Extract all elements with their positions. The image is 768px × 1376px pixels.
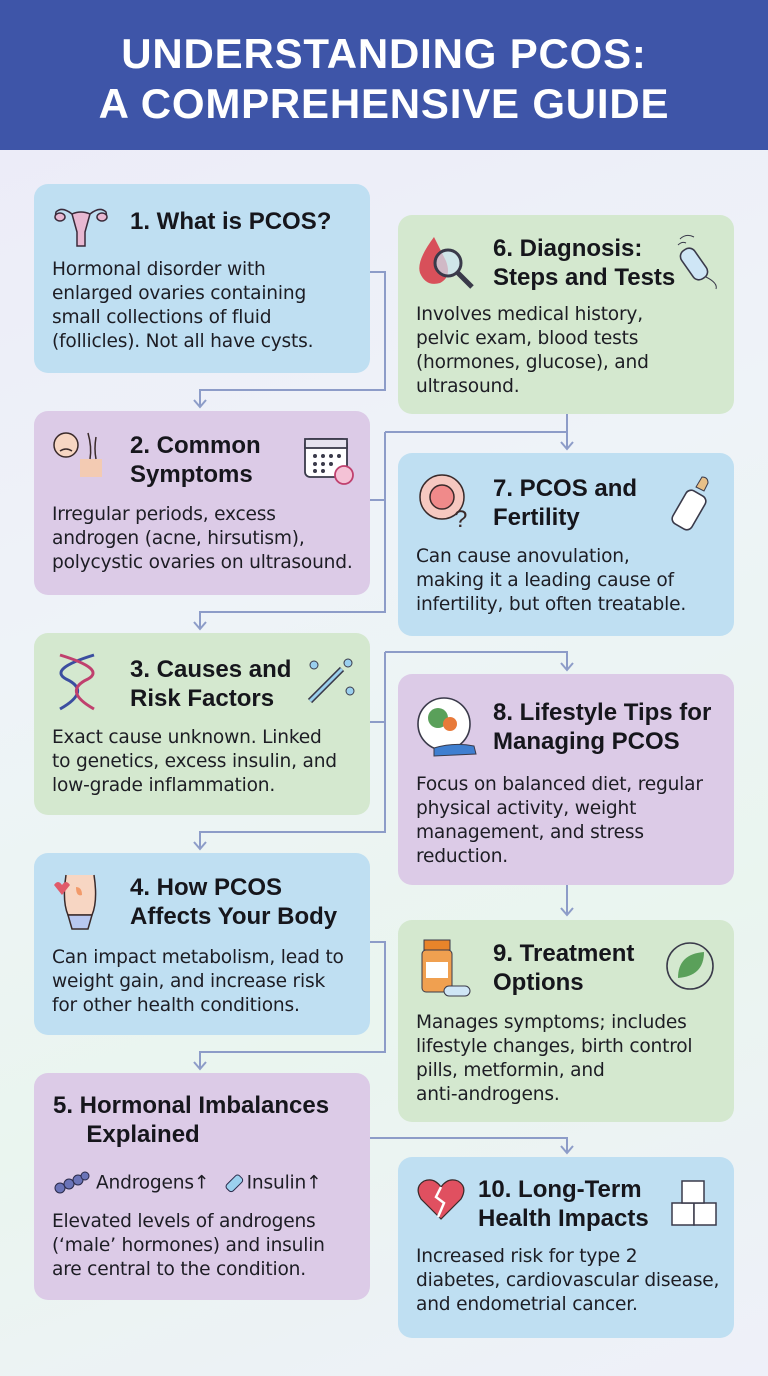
panel: 5 hormonal imbalances: (‘male’ hormones) and insulin: [52, 1235, 325, 1256]
panel: 1 what is PCOS: [34, 184, 370, 373]
panel: 4 body effects: [34, 853, 370, 1035]
panel: 6 diagnosis: (hormones, glucose), and: [416, 352, 649, 373]
panel: 9 treatment: anti-androgens.: [416, 1084, 560, 1105]
panel: 3 causes: [34, 633, 370, 815]
panel: 3 causes: Exact cause unknown. Linked: [52, 727, 322, 748]
title: [0, 0, 768, 150]
panel: 6 diagnosis: pelvic exam, blood tests: [416, 328, 638, 349]
panel: 3 causes: low-grade inflammation.: [52, 775, 275, 796]
panel: 10 long-term: Health Impacts: [478, 1204, 649, 1232]
icon: ultrasound probe: [678, 234, 717, 290]
icon: syringe: [308, 658, 354, 704]
panel: 9 treatment: 9. Treatment: [493, 940, 634, 967]
icon: egg cell: [419, 474, 467, 531]
panel: 10 long-term: diabetes, cardiovascular disease,: [416, 1270, 719, 1291]
panel: 10 long-term: Increased risk for type 2: [416, 1246, 637, 1267]
icon: bottle: [671, 476, 708, 531]
panel: 4 body effects: Can impact metabolism, lead to: [52, 947, 344, 968]
panel: 8 lifestyle: Focus on balanced diet, regular: [416, 774, 703, 795]
panel: 1 what is PCOS: small collections of fluid: [52, 307, 271, 328]
panel: 10 long-term: [398, 1157, 734, 1338]
panel: 1 what is PCOS: (follicles). Not all have cysts.: [52, 331, 313, 352]
icon: broken heart: [418, 1179, 464, 1220]
panel: 5 hormonal imbalances: 5. Hormonal Imbalances: [53, 1092, 329, 1119]
panel: 5 hormonal imbalances: are central to the condition.: [52, 1259, 306, 1280]
panel: 6 diagnosis: Involves medical history,: [416, 304, 643, 325]
panel: 4 body effects: 4. How PCOS: [130, 874, 282, 901]
panel: 4 body effects: Affects Your Body: [130, 902, 337, 930]
panel: 5 hormonal imbalances: [34, 1073, 370, 1300]
panel: 2 common symptoms: polycystic ovaries on ultrasound.: [52, 552, 353, 573]
panel: 9 treatment: [398, 920, 734, 1122]
panel: 8 lifestyle: Managing PCOS: [493, 728, 680, 754]
icon: pill bottle: [422, 940, 470, 996]
panel: 9 treatment: lifestyle changes, birth control: [416, 1036, 692, 1057]
panel: 10 long-term: and endometrial cancer.: [416, 1294, 638, 1315]
panel: 9 treatment: Options: [493, 968, 584, 996]
icon: torso: [54, 874, 96, 930]
icon: DNA: [59, 654, 95, 710]
panel: 2 common symptoms: Symptoms: [130, 460, 253, 488]
panel: 8 lifestyle: [398, 674, 734, 885]
panel: 7 fertility: infertility, but often treatable.: [416, 594, 686, 615]
icon: uterus: [54, 208, 108, 247]
panel: 1 what is PCOS: enlarged ovaries containing: [52, 283, 306, 304]
panel: 4 body effects: weight gain, and increase risk: [52, 971, 325, 992]
panel: 7 fertility: Can cause anovulation,: [416, 546, 630, 567]
panel: 8 lifestyle: management, and stress: [416, 822, 644, 843]
panel: 8 lifestyle: physical activity, weight: [416, 798, 636, 819]
panel: 9 treatment: Manages symptoms; includes: [416, 1012, 687, 1033]
icon: calendar: [304, 438, 354, 485]
title: UNDERSTANDING PCOS:: [121, 30, 647, 77]
panel: 6 diagnosis: 6. Diagnosis:: [493, 235, 642, 262]
panel: 7 fertility: [398, 453, 734, 636]
panel: 6 diagnosis: ultrasound.: [416, 376, 519, 397]
panel: 2 common symptoms: 2. Common: [130, 432, 261, 459]
panel: 3 causes: Risk Factors: [130, 684, 274, 712]
panel: 10 long-term: 10. Long-Term: [478, 1176, 642, 1203]
icon: face and hair: [53, 432, 102, 477]
icon: sugar cubes: [671, 1180, 717, 1226]
title: A COMPREHENSIVE GUIDE: [99, 80, 669, 127]
panel: 9 treatment: pills, metformin, and: [416, 1060, 605, 1081]
panel: 7 fertility: making it a leading cause of: [416, 570, 674, 591]
panel: 2 common symptoms: [34, 411, 370, 595]
icon: plate with vegetables and shoe: [417, 697, 477, 756]
panel: 1 what is PCOS: 1. What is PCOS?: [130, 208, 331, 235]
icon row: androgens and insulin: Androgens↑ Insulin↑: [96, 1172, 321, 1194]
panel: 6 diagnosis: [398, 215, 734, 414]
panel: 5 hormonal imbalances: Explained: [86, 1120, 200, 1148]
panel: 4 body effects: for other health conditions.: [52, 995, 300, 1016]
icon: leaf: [666, 942, 714, 990]
panel: 1 what is PCOS: Hormonal disorder with: [52, 259, 266, 280]
icon: blood drop magnifier: [419, 237, 474, 289]
panel: 5 hormonal imbalances: Elevated levels of androgens: [52, 1211, 316, 1232]
panel: 7 fertility: 7. PCOS and: [493, 475, 637, 502]
panel: 3 causes: 3. Causes and: [130, 656, 291, 683]
panel: 7 fertility: Fertility: [493, 504, 580, 530]
panel: 6 diagnosis: Steps and Tests: [493, 264, 675, 290]
panel: 8 lifestyle: 8. Lifestyle Tips for: [493, 699, 711, 726]
panel: 8 lifestyle: reduction.: [416, 846, 508, 867]
panel: 2 common symptoms: Irregular periods, excess: [52, 504, 276, 525]
panel: 3 causes: to genetics, excess insulin, and: [52, 751, 337, 772]
panel: 2 common symptoms: androgen (acne, hirsutism),: [52, 528, 305, 549]
